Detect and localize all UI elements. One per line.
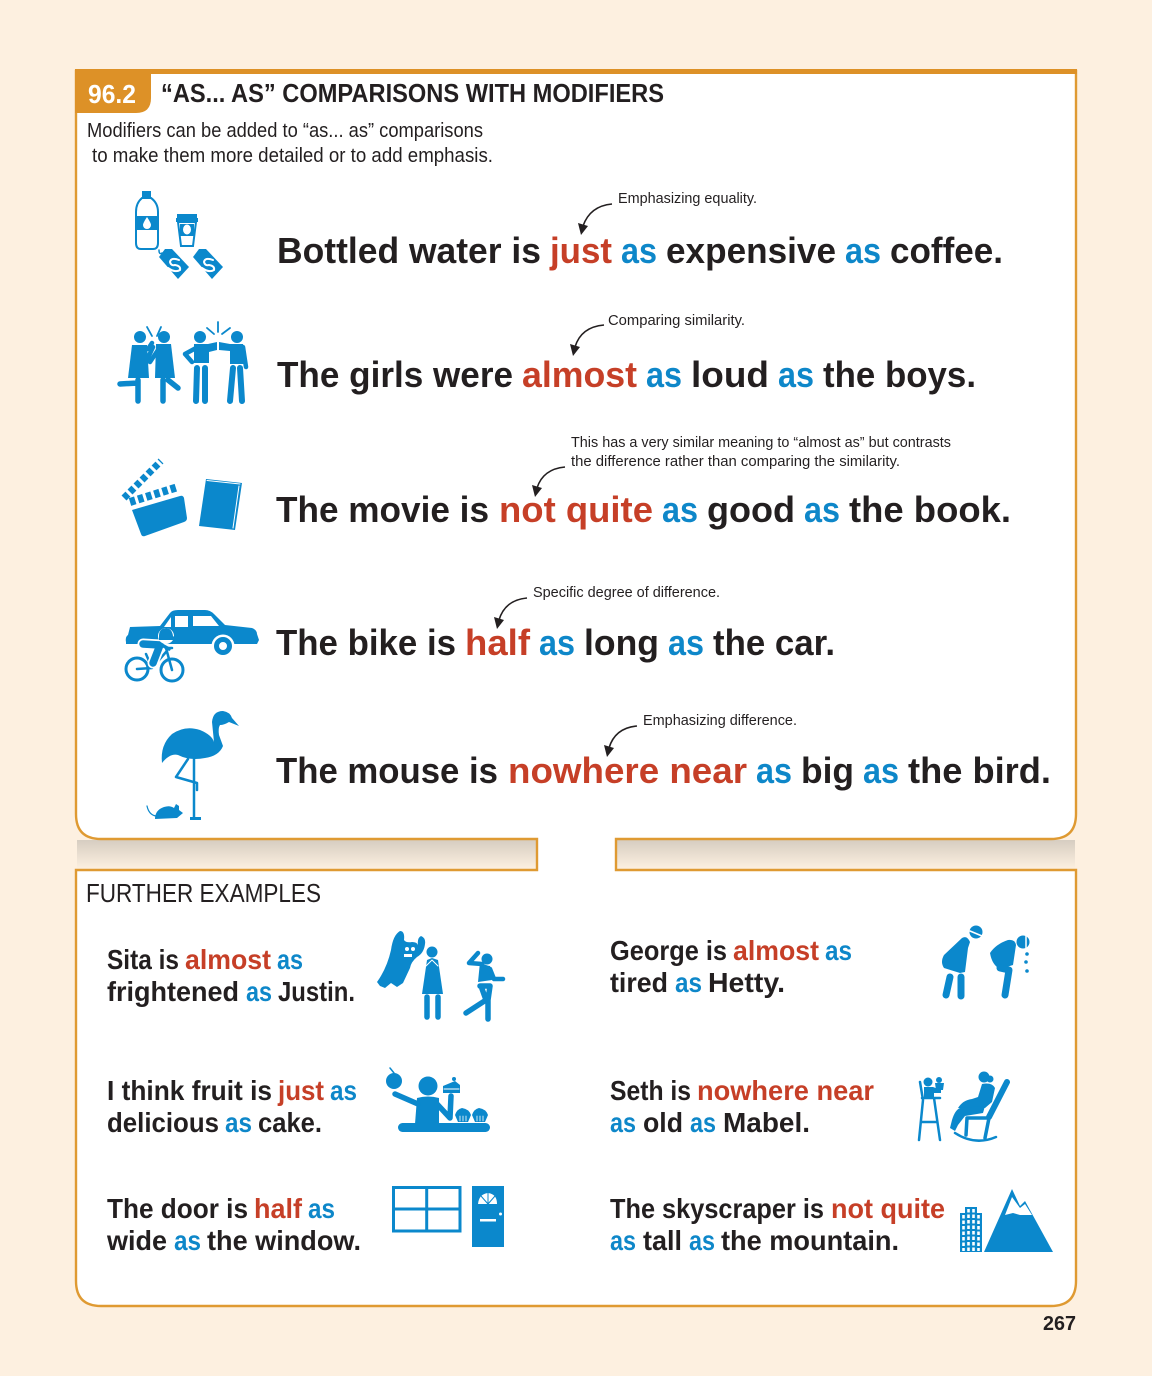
example: door and window: the window. bbox=[207, 1225, 361, 1256]
icon: flamingo and mouse bbox=[147, 711, 239, 820]
example: fruit and cake: cake. bbox=[258, 1107, 322, 1138]
example: skyscraper and mountain: The skyscraper is bbox=[610, 1193, 824, 1224]
annotation: not quite as: This has a very similar meaning to “almost as” but contrasts bbox=[571, 434, 951, 451]
sentence 1: as bbox=[621, 230, 657, 271]
annotation: emphasizing equality bbox=[578, 190, 757, 235]
example: Seth and Mabel: old bbox=[643, 1107, 683, 1138]
example: door and window: as bbox=[174, 1225, 201, 1256]
sentence 5: as bbox=[863, 750, 899, 791]
annotation: specific degree of difference: Specific degree of difference. bbox=[533, 584, 720, 601]
example: Sita and Justin: as bbox=[246, 976, 272, 1007]
example: George and Hetty: George is bbox=[610, 935, 727, 966]
section number tab bbox=[75, 69, 151, 113]
example: Sita and Justin: frightened bbox=[107, 976, 239, 1007]
sentence 3 bbox=[276, 489, 1011, 530]
annotation: not quite as bbox=[532, 434, 951, 497]
example: George and Hetty: Hetty. bbox=[708, 967, 785, 998]
icon: ghost, frightened woman, running man bbox=[377, 931, 503, 1019]
sentence 5: big bbox=[801, 750, 854, 791]
sentence 4: The bike is bbox=[276, 622, 456, 663]
sentence 1: as bbox=[845, 230, 881, 271]
example: fruit and cake: as bbox=[225, 1107, 252, 1138]
example: skyscraper and mountain: as bbox=[689, 1225, 715, 1256]
icon: person with apple, cake and cupcakes bbox=[386, 1068, 490, 1132]
example: Sita and Justin bbox=[107, 944, 355, 1007]
icon: baby in high chair and old woman in rocking chair bbox=[919, 1072, 1007, 1141]
example: Seth and Mabel: Seth is bbox=[610, 1075, 691, 1106]
section number tab: 96.2 bbox=[88, 79, 136, 109]
example: George and Hetty: tired bbox=[610, 967, 668, 998]
icon: girls and boys being loud bbox=[120, 322, 246, 401]
sentence 5: nowhere near bbox=[508, 750, 747, 791]
example: skyscraper and mountain: tall bbox=[643, 1225, 682, 1256]
example: door and window: wide bbox=[106, 1225, 167, 1256]
annotation: not quite as: the difference rather than comparing the similarity. bbox=[571, 453, 900, 470]
panel: main and further examples outline bbox=[76, 71, 1076, 1306]
example: skyscraper and mountain: the mountain. bbox=[721, 1225, 899, 1256]
sentence 3: The movie is bbox=[276, 489, 489, 530]
sentence 1: coffee. bbox=[890, 230, 1003, 271]
intro text: Modifiers can be added to “as... as” comparisons bbox=[87, 120, 483, 142]
sentence 3: not quite bbox=[499, 489, 653, 530]
sentence 5: The mouse is bbox=[276, 750, 498, 791]
example: fruit and cake: I think fruit is bbox=[107, 1075, 272, 1106]
example: Seth and Mabel bbox=[610, 1075, 874, 1138]
example: fruit and cake: delicious bbox=[107, 1107, 219, 1138]
connector shadow bbox=[77, 840, 1075, 869]
sentence 2: as bbox=[646, 354, 682, 395]
sentence 3: as bbox=[804, 489, 840, 530]
example: door and window bbox=[106, 1193, 361, 1256]
sentence 4: the car. bbox=[713, 622, 835, 663]
example: skyscraper and mountain: as bbox=[610, 1225, 636, 1256]
example: Sita and Justin: Sita is bbox=[107, 944, 179, 975]
example: Seth and Mabel: as bbox=[690, 1107, 716, 1138]
icon: two tired people bbox=[942, 926, 1030, 996]
example: George and Hetty bbox=[610, 935, 852, 998]
intro text bbox=[87, 120, 493, 167]
example: Sita and Justin: almost bbox=[185, 944, 271, 975]
example: skyscraper and mountain bbox=[610, 1193, 945, 1256]
sentence 2: the boys. bbox=[823, 354, 976, 395]
sentence 2 bbox=[277, 354, 976, 395]
annotation: specific degree of difference bbox=[494, 584, 720, 629]
sentence 1: just bbox=[549, 230, 612, 271]
example: George and Hetty: as bbox=[825, 935, 852, 966]
intro text: to make them more detailed or to add emphasis. bbox=[92, 145, 493, 167]
icon: skyscraper and mountain bbox=[960, 1189, 1053, 1252]
annotation: comparing similarity bbox=[570, 312, 745, 356]
example: Seth and Mabel: nowhere near bbox=[697, 1075, 874, 1106]
icon: clapperboard and book bbox=[124, 461, 242, 536]
example: Sita and Justin: Justin. bbox=[278, 976, 355, 1007]
sentence 2: The girls were bbox=[277, 354, 513, 395]
panel top bar bbox=[75, 69, 1077, 74]
example: fruit and cake: as bbox=[330, 1075, 357, 1106]
sentence 2: loud bbox=[691, 354, 769, 395]
sentence 5: the bird. bbox=[908, 750, 1051, 791]
sentence 1 bbox=[277, 230, 1003, 271]
further examples heading: FURTHER EXAMPLES bbox=[86, 878, 321, 908]
example: Seth and Mabel: Mabel. bbox=[723, 1107, 810, 1138]
sentence 4: long bbox=[584, 622, 659, 663]
annotation: emphasizing difference: Emphasizing difference. bbox=[643, 712, 797, 729]
sentence 1: Bottled water is bbox=[277, 230, 541, 271]
sentence 3: the book. bbox=[849, 489, 1011, 530]
example: Seth and Mabel: as bbox=[610, 1107, 636, 1138]
heading: “AS... AS” COMPARISONS WITH MODIFIERS bbox=[161, 78, 664, 108]
sentence 5 bbox=[276, 750, 1051, 791]
example: skyscraper and mountain: not quite bbox=[831, 1193, 945, 1224]
sentence 1: expensive bbox=[666, 230, 836, 271]
sentence 2: as bbox=[778, 354, 814, 395]
icon: car and cyclist bbox=[126, 610, 259, 681]
example: Sita and Justin: as bbox=[277, 944, 303, 975]
example: door and window: The door is bbox=[107, 1193, 248, 1224]
annotation: comparing similarity: Comparing similarity. bbox=[608, 312, 745, 329]
sentence 4: as bbox=[668, 622, 704, 663]
sentence 2: almost bbox=[522, 354, 637, 395]
example: fruit and cake bbox=[107, 1075, 357, 1138]
sentence 3: good bbox=[707, 489, 795, 530]
sentence 4 bbox=[276, 622, 835, 663]
example: fruit and cake: just bbox=[277, 1075, 324, 1106]
icon: window and door bbox=[394, 1186, 504, 1247]
annotation: emphasizing equality: Emphasizing equality. bbox=[618, 190, 757, 207]
page number: 267 bbox=[1043, 1313, 1076, 1335]
sentence 5: as bbox=[756, 750, 792, 791]
example: door and window: half bbox=[254, 1193, 303, 1224]
sentence 4: as bbox=[539, 622, 575, 663]
sentence 4: half bbox=[465, 622, 531, 663]
example: George and Hetty: almost bbox=[733, 935, 819, 966]
sentence 3: as bbox=[662, 489, 698, 530]
icon: water bottle, coffee cup and price tags bbox=[135, 191, 223, 279]
example: door and window: as bbox=[308, 1193, 335, 1224]
example: George and Hetty: as bbox=[675, 967, 702, 998]
annotation: emphasizing difference bbox=[604, 712, 797, 757]
